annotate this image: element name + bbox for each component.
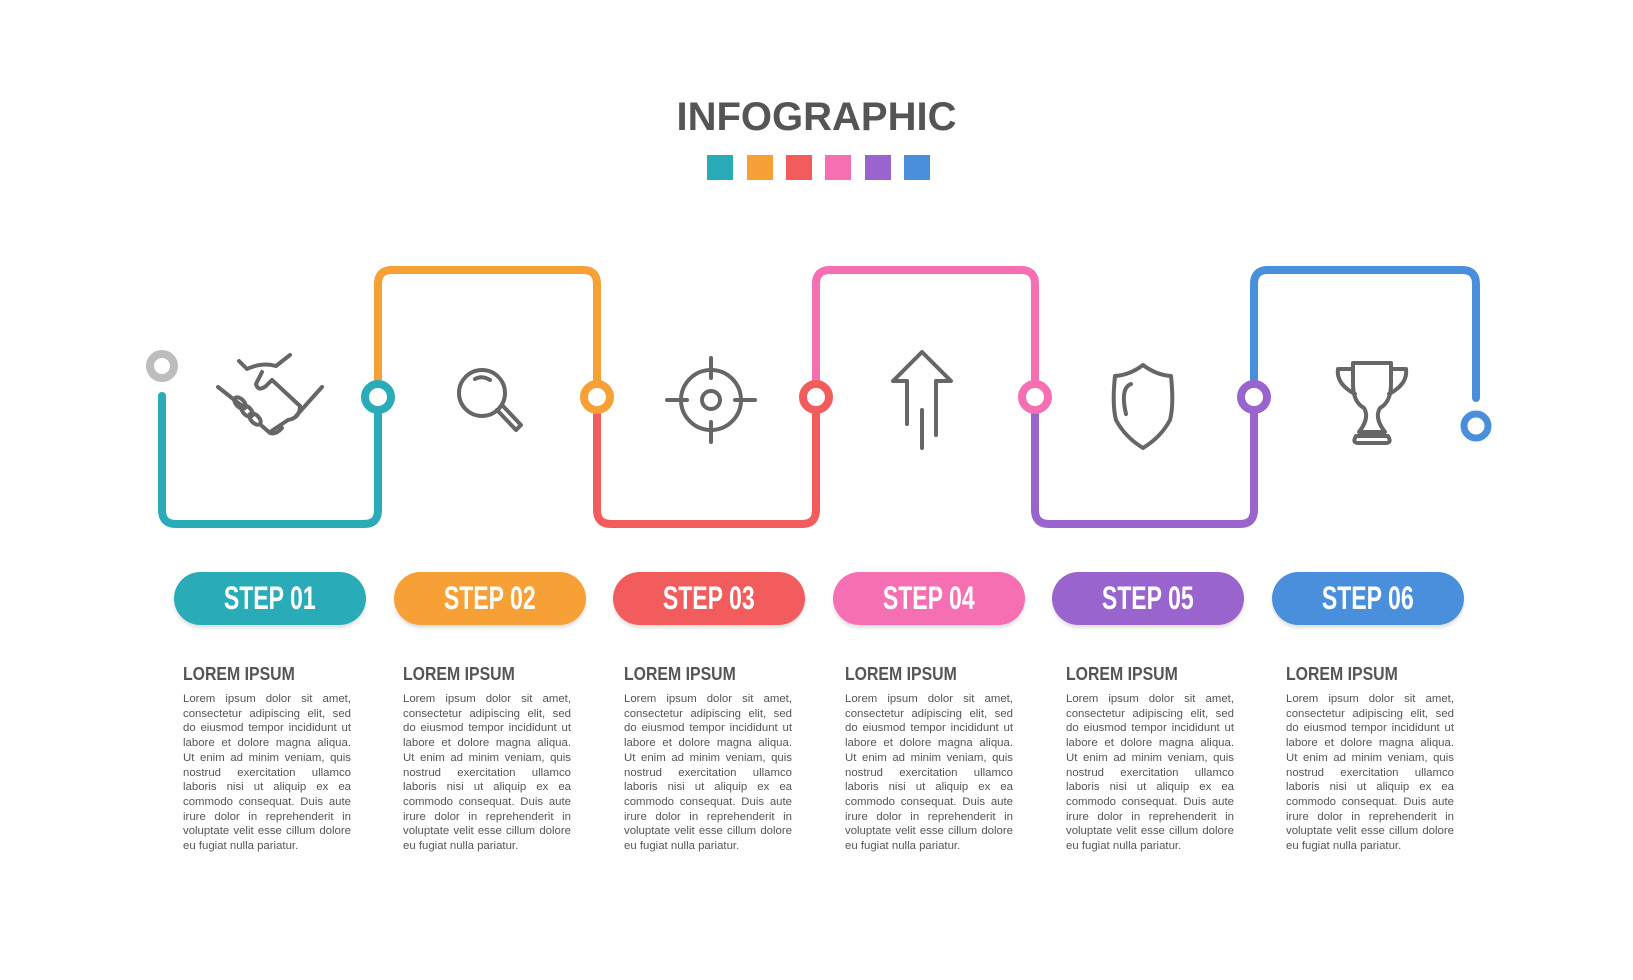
pill: step 04: STEP 04 bbox=[883, 580, 975, 616]
end node bbox=[1464, 414, 1488, 438]
icon: shield bbox=[1114, 365, 1172, 448]
text block 1: LOREM IPSUM bbox=[183, 664, 295, 684]
text block 3: LOREM IPSUM bbox=[624, 664, 736, 684]
text block 5: Lorem ipsum dolor sit amet, consectetur adipiscing elit, sed do eiusmod tempor incididunt ut labore et dolore magna aliqua. Ut enim ad minim veniam, quis nostrud exercitation ullamco laboris nisi ut aliquip ex ea commodo consequat. Duis aute irure dolor in reprehenderit in voluptate velit esse cillum dolore eu fugiat nulla pariatur. bbox=[1066, 693, 1234, 852]
icon: arrow up bbox=[893, 352, 951, 448]
icon: handshake bbox=[218, 355, 322, 433]
pill: step 02 bbox=[394, 572, 586, 625]
pill: step 05: STEP 05 bbox=[1102, 580, 1194, 616]
icon: magnifier bbox=[459, 370, 521, 430]
start node bbox=[150, 354, 174, 378]
text block 4: LOREM IPSUM bbox=[845, 664, 957, 684]
pill: step 05 bbox=[1052, 572, 1244, 625]
pill: step 01: STEP 01 bbox=[224, 580, 316, 616]
pill: step 03: STEP 03 bbox=[663, 580, 755, 616]
pill: step 04 bbox=[833, 572, 1025, 625]
text block 2: Lorem ipsum dolor sit amet, consectetur adipiscing elit, sed do eiusmod tempor incididunt ut labore et dolore magna aliqua. Ut enim ad minim veniam, quis nostrud exercitation ullamco laboris nisi ut aliquip ex ea commodo consequat. Duis aute irure dolor in reprehenderit in voluptate velit esse cillum dolore eu fugiat nulla pariatur. bbox=[403, 693, 571, 852]
step nodes bbox=[365, 384, 1267, 410]
text block 5: LOREM IPSUM bbox=[1066, 664, 1178, 684]
icon: target bbox=[667, 358, 755, 442]
colour squares bbox=[707, 155, 930, 180]
text block 6: LOREM IPSUM bbox=[1286, 664, 1398, 684]
pill: step 06: STEP 06 bbox=[1322, 580, 1414, 616]
icon: trophy bbox=[1338, 363, 1406, 443]
text block 2: LOREM IPSUM bbox=[403, 664, 515, 684]
pill: step 06 bbox=[1272, 572, 1464, 625]
pill: step 02: STEP 02 bbox=[444, 580, 536, 616]
title: INFOGRAPHIC bbox=[676, 95, 956, 139]
text block 6: Lorem ipsum dolor sit amet, consectetur adipiscing elit, sed do eiusmod tempor incididunt ut labore et dolore magna aliqua. Ut enim ad minim veniam, quis nostrud exercitation ullamco laboris nisi ut aliquip ex ea commodo consequat. Duis aute irure dolor in reprehenderit in voluptate velit esse cillum dolore eu fugiat nulla pariatur. bbox=[1286, 693, 1454, 852]
text block 3: Lorem ipsum dolor sit amet, consectetur adipiscing elit, sed do eiusmod tempor incididunt ut labore et dolore magna aliqua. Ut enim ad minim veniam, quis nostrud exercitation ullamco laboris nisi ut aliquip ex ea commodo consequat. Duis aute irure dolor in reprehenderit in voluptate velit esse cillum dolore eu fugiat nulla pariatur. bbox=[624, 693, 792, 852]
text block 1: Lorem ipsum dolor sit amet, consectetur adipiscing elit, sed do eiusmod tempor incididunt ut labore et dolore magna aliqua. Ut enim ad minim veniam, quis nostrud exercitation ullamco laboris nisi ut aliquip ex ea commodo consequat. Duis aute irure dolor in reprehenderit in voluptate velit esse cillum dolore eu fugiat nulla pariatur. bbox=[183, 693, 351, 852]
pill: step 03 bbox=[613, 572, 805, 625]
pill: step 01 bbox=[174, 572, 366, 625]
text block 4: Lorem ipsum dolor sit amet, consectetur adipiscing elit, sed do eiusmod tempor incididunt ut labore et dolore magna aliqua. Ut enim ad minim veniam, quis nostrud exercitation ullamco laboris nisi ut aliquip ex ea commodo consequat. Duis aute irure dolor in reprehenderit in voluptate velit esse cillum dolore eu fugiat nulla pariatur. bbox=[845, 693, 1013, 852]
